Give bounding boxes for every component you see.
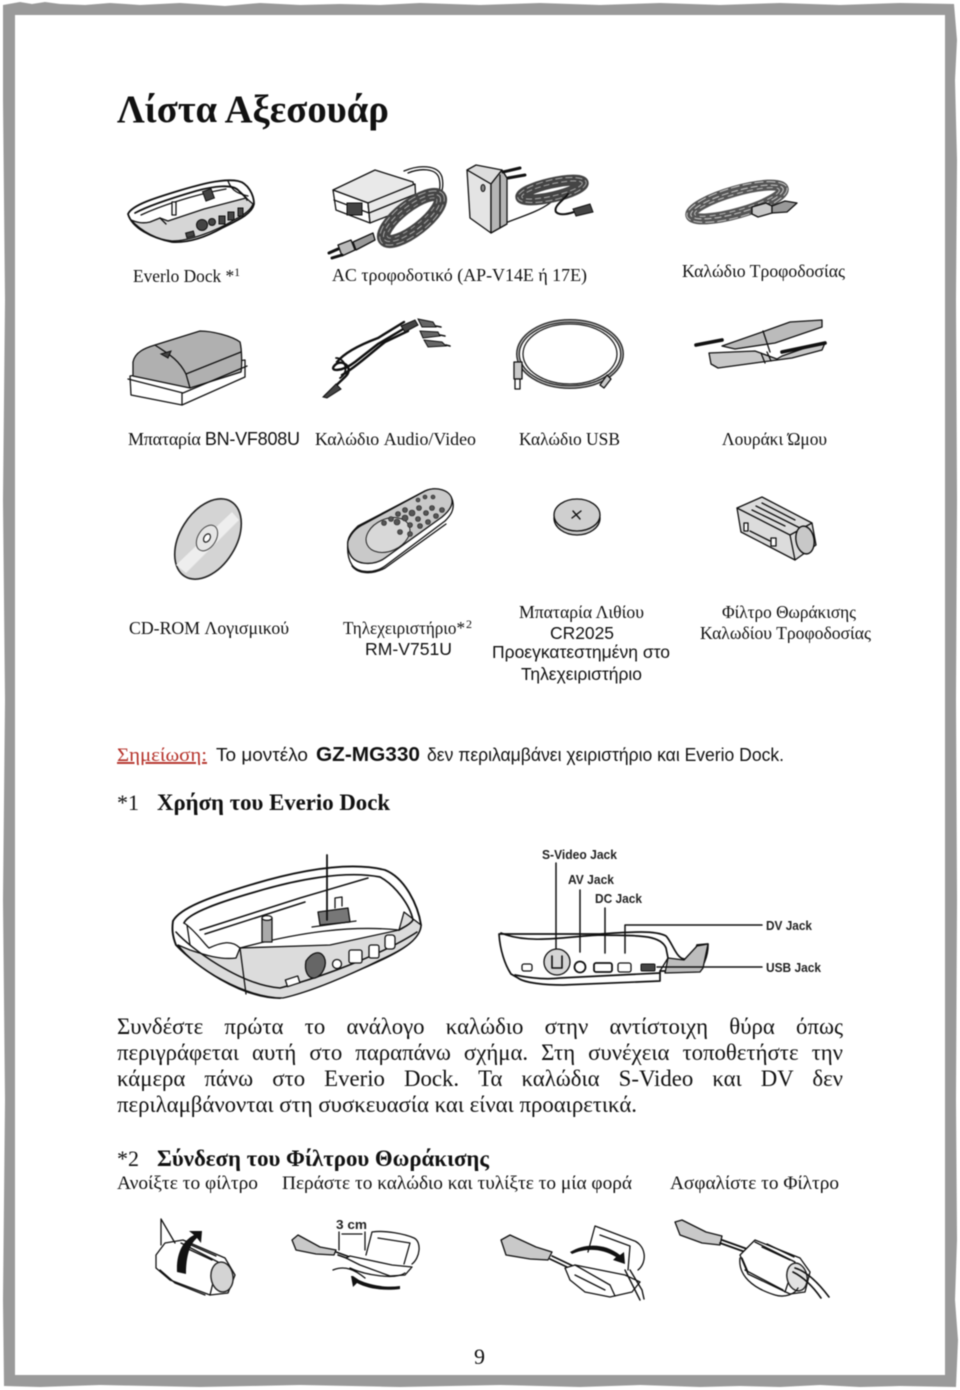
label: USB cable: Καλώδιο USB (519, 429, 620, 449)
paragraph (116, 1014, 844, 1118)
jack labels and leader lines: DC Jack (595, 891, 643, 906)
note: δεν περιλαμβάνει χειριστήριο και Everio Dock. (427, 745, 784, 765)
paragraph: περιλαμβάνονται στη συσκευασία και είναι προαιρετικά. (117, 1092, 637, 1117)
illustration: step 4 locked filter (675, 1220, 829, 1298)
note: Το μοντέλο (216, 745, 308, 765)
icon: CD-ROM (161, 487, 255, 591)
icon: audio video cable (323, 319, 450, 398)
icon: USB cable (514, 321, 622, 389)
heading: connecting the filter: *2 (117, 1146, 139, 1171)
icon: shoulder strap (696, 320, 825, 368)
illustration: step 2 wrap cable (292, 1217, 419, 1290)
label: AV cable: Καλώδιο Audio/Video (315, 429, 476, 449)
icon: coin battery (554, 499, 600, 535)
icon: power cord (683, 173, 797, 231)
step labels: Ανοίξτε το φίλτρο (117, 1173, 258, 1194)
jack labels and leader lines: AV Jack (568, 872, 615, 887)
paragraph: περιγράφεται αυτή στο παραπάνω σχήμα. Στη συνέχεια τοποθετήστε την (117, 1040, 843, 1065)
label: remote control (343, 617, 472, 659)
label: shoulder strap: Λουράκι Ώμου (722, 429, 827, 449)
label: battery: Μπαταρία BN-VF808U (128, 429, 300, 449)
icon: battery (128, 331, 247, 405)
jack labels and leader lines (542, 847, 822, 975)
label: Everio Dock: 1 (234, 265, 240, 279)
paragraph: Συνδέστε πρώτα το ανάλογο καλώδιο στην αντίστοιχη θύρα όπως (117, 1014, 843, 1039)
note: Σημείωση: (117, 745, 207, 766)
illustration: step 2 wrap cable: 3 cm (336, 1217, 367, 1232)
illustration: dock side jacks (499, 932, 708, 985)
label: lithium battery: Τηλεχειριστήριο (521, 664, 642, 684)
label: ferrite filter (700, 602, 871, 643)
jack labels and leader lines: USB Jack (766, 960, 822, 975)
label: lithium battery: Προεγκατεστημένη στο (492, 642, 670, 662)
jack labels and leader lines: DV Jack (766, 918, 813, 933)
label: remote control: RM-V751U (365, 639, 452, 659)
page number: 9 (474, 1344, 485, 1369)
label: remote control: Τηλεχειριστήριο* (343, 618, 465, 638)
icon: AC adapter (329, 167, 453, 258)
icon: ferrite filter (737, 497, 816, 560)
illustration: step 1 open filter (156, 1219, 235, 1295)
icon: Everio dock (128, 180, 254, 242)
label: CD-ROM: CD-ROM Λογισμικού (129, 618, 289, 638)
label: lithium battery: Μπαταρία Λιθίου (519, 602, 644, 622)
paragraph: κάμερα πάνω στο Everio Dock. Τα καλώδια S-Video και DV δεν (117, 1066, 843, 1091)
label: ferrite filter: Φίλτρο Θωράκισης (722, 602, 856, 622)
title: Λίστα Αξεσουάρ (117, 88, 389, 131)
step labels: Ασφαλίστε το Φίλτρο (670, 1173, 839, 1194)
label: lithium battery: CR2025 (550, 623, 614, 643)
heading: connecting the filter: Σύνδεση του Φίλτρου Θωράκισης (157, 1146, 489, 1171)
note (117, 744, 784, 766)
icon: remote control (348, 489, 453, 573)
jack labels and leader lines: S-Video Jack (542, 847, 618, 862)
label: ferrite filter: Καλωδίου Τροφοδοσίας (700, 623, 871, 643)
icon: wall adapter (467, 165, 593, 233)
illustration: large dock (172, 855, 421, 998)
step labels (117, 1173, 839, 1194)
heading: using the Everio Dock: Χρήση του Everio Dock (157, 790, 390, 815)
label: AC adapter: AC τροφοδοτικό (AP-V14E ή 17E) (332, 265, 587, 286)
illustration: step 3 close around cable (501, 1226, 644, 1300)
label: lithium battery (492, 602, 670, 684)
label: Everio Dock: Everlo Dock * (133, 266, 238, 286)
label: remote control: 2 (466, 617, 472, 631)
step labels: Περάστε το καλώδιο και τυλίξτε το μία φορά (282, 1173, 632, 1194)
note: GZ-MG330 (316, 744, 420, 766)
label: power cord: Καλώδιο Τροφοδοσίας (682, 261, 845, 281)
heading: using the Everio Dock: *1 (117, 790, 139, 815)
